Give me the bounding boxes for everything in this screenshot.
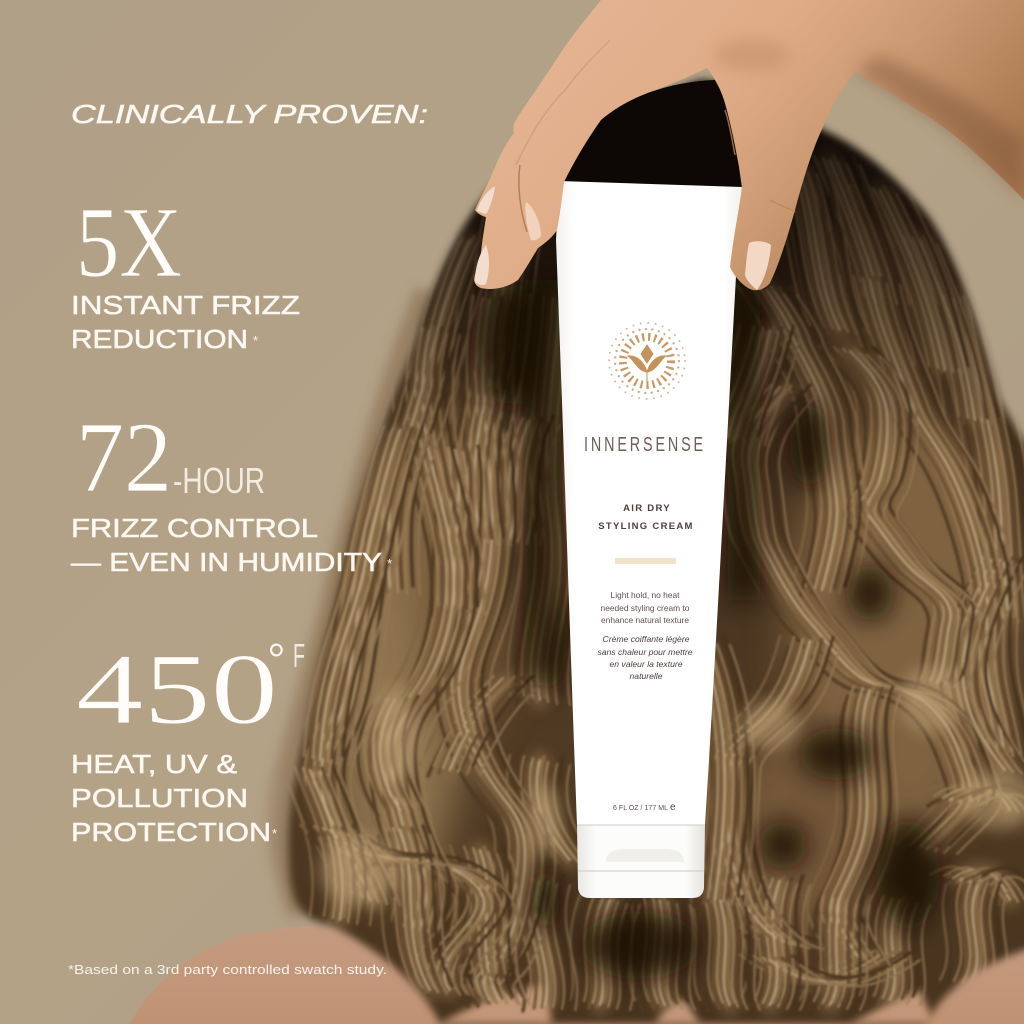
- dark crown above tube: [555, 80, 760, 190]
- tube body: [556, 181, 742, 825]
- nail: ring finger: [477, 186, 495, 214]
- unit: degrees F: [268, 636, 305, 682]
- english description: Light hold, no heat: [611, 590, 680, 600]
- skin showing through hair ends: [440, 985, 935, 1024]
- title: CLINICALLY PROVEN:: [71, 99, 428, 129]
- hair tone patches: [325, 220, 1010, 930]
- label: FRIZZ CONTROL: [71, 513, 318, 543]
- number: 72: 72: [76, 401, 172, 513]
- unit: degrees F: °: [268, 636, 285, 682]
- stat: 450F protection: PROTECTION: [71, 817, 271, 847]
- stat: 5X frizz reduction: REDUCTION: [71, 324, 248, 354]
- dark shading over upper hair: [390, 142, 1006, 440]
- product name: AIR DRY: [623, 503, 671, 514]
- gold accent bar: [615, 558, 676, 564]
- unit: degrees F: F: [293, 637, 305, 674]
- shadows between waves: [477, 280, 940, 979]
- french description: sans chaleur pour mettre: [597, 647, 693, 657]
- label: INSTANT FRIZZ: [71, 290, 300, 320]
- french description: naturelle: [630, 671, 663, 681]
- stat: 5X frizz reduction: [71, 186, 300, 354]
- nail: little finger: [475, 245, 489, 285]
- french description: [597, 634, 693, 681]
- product name: [598, 503, 694, 532]
- hair: [270, 70, 1024, 1024]
- stat: 5X frizz reduction: *: [253, 333, 258, 348]
- finger creases: [516, 40, 795, 232]
- stat: 450F protection: POLLUTION: [71, 783, 248, 813]
- hair strand bundles: [280, 155, 1024, 1011]
- french description: en valeur la texture: [609, 659, 683, 669]
- product tube: [556, 181, 742, 898]
- number: 5X: 5X: [76, 186, 182, 298]
- palm shadow: [714, 39, 790, 71]
- english description: needed styling cream to: [601, 603, 690, 613]
- arm and palm: [474, 0, 1024, 290]
- suffix: hour: -HOUR: [173, 460, 265, 501]
- wave bands, blurred base: [310, 160, 1010, 1005]
- label: HEAT, UV &: [71, 749, 237, 779]
- stat: 72-hour frizz control: — EVEN IN HUMIDITY: [71, 547, 382, 577]
- stat: 450F protection: [71, 633, 305, 847]
- stat: 72-hour frizz control: *: [387, 556, 392, 571]
- volume label: 6 FL OZ / 177 ML: [613, 805, 668, 812]
- product name: STYLING CREAM: [598, 521, 694, 532]
- shoulders: [130, 926, 1024, 1024]
- arm shadow: [855, 55, 1024, 200]
- icon: sunburst logo: [609, 323, 685, 399]
- english description: enhance natural texture: [601, 615, 689, 625]
- icon: e mark: e: [670, 802, 676, 813]
- brand name: INNERSENSE: [584, 434, 706, 456]
- footnote: *Based on a 3rd party controlled swatch study.: [68, 962, 387, 977]
- french description: Crème coiffante légère: [603, 634, 690, 644]
- nail: thumb: [745, 241, 771, 290]
- stat: 72-hour frizz control: [71, 401, 392, 577]
- number: 450: 450: [76, 633, 278, 745]
- english description: [601, 590, 690, 625]
- nail: index finger: [525, 202, 541, 240]
- soft hair edge: [270, 290, 425, 915]
- golden highlights: [320, 666, 1024, 906]
- tube cap: [577, 825, 705, 898]
- stat: 450F protection: *: [272, 826, 277, 841]
- hand and arm: [474, 0, 1024, 290]
